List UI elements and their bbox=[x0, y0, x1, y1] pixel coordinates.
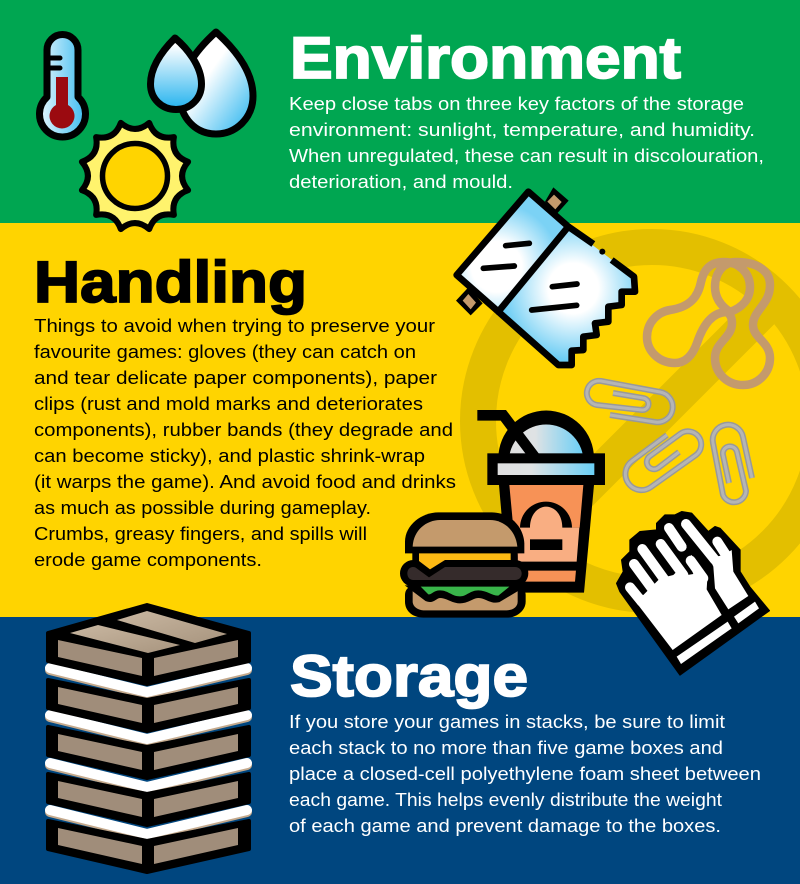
icon: paper clip 2 bbox=[625, 431, 701, 490]
text: handling body: Things to avoid when trying to preserve your bbox=[34, 316, 435, 336]
text: storage body: If you store your games in stacks, be sure to limit bbox=[289, 712, 725, 732]
icon: plastic shrink wrap bbox=[456, 187, 635, 365]
text: storage body: each game. This helps evenly distribute the weight bbox=[289, 790, 722, 810]
text: environment body: When unregulated, these can result in discolouration, bbox=[289, 146, 764, 166]
text: storage body: place a closed-cell polyethylene foam sheet between bbox=[289, 764, 761, 784]
box 5 bbox=[48, 821, 249, 872]
text: handling body: and tear delicate paper components), paper bbox=[34, 368, 437, 388]
text: handling body: Crumbs, greasy fingers, and spills will bbox=[34, 524, 367, 544]
box 2 bbox=[48, 680, 249, 731]
foam sheets bbox=[50, 668, 247, 836]
icon: prohibition sign bbox=[478, 247, 800, 595]
top box bbox=[48, 605, 249, 684]
text: handling body: (it warps the game). And avoid food and drinks bbox=[34, 472, 456, 492]
box 4 bbox=[48, 774, 249, 825]
heading: environment: Environment bbox=[290, 26, 681, 91]
icon: water drops bbox=[150, 32, 253, 134]
text: handling body: as much as possible during gameplay. bbox=[34, 498, 371, 518]
panel: storage bbox=[0, 617, 800, 884]
text: storage body: of each game and prevent damage to the boxes. bbox=[289, 816, 721, 836]
icon: gloves bbox=[617, 512, 769, 675]
panel: handling bbox=[0, 223, 800, 617]
icon: sun bbox=[82, 123, 188, 229]
text: handling body bbox=[34, 316, 456, 570]
text: environment body: Keep close tabs on three key factors of the storage bbox=[289, 94, 744, 114]
icon: thermometer bbox=[40, 34, 86, 137]
heading: handling: Handling bbox=[34, 250, 307, 315]
text: storage body: each stack to no more than five game boxes and bbox=[289, 738, 723, 758]
text: environment body: deterioration, and mould. bbox=[289, 172, 513, 192]
panel: environment bbox=[0, 0, 800, 223]
text: storage body bbox=[289, 712, 761, 836]
text: environment body: environment: sunlight, temperature, and humidity. bbox=[289, 120, 755, 140]
text: handling body: can become sticky), and plastic shrink-wrap bbox=[34, 446, 425, 466]
heading: storage: Storage bbox=[290, 644, 528, 709]
box 3 bbox=[48, 727, 249, 778]
text: environment body bbox=[289, 94, 764, 192]
icon: burger bbox=[400, 512, 528, 618]
icon: stack of boxes bbox=[48, 605, 249, 872]
text: handling body: favourite games: gloves (they can catch on bbox=[34, 342, 416, 362]
text: handling body: components), rubber bands (they degrade and bbox=[34, 420, 453, 440]
icon: rubber band bbox=[647, 262, 770, 385]
text: handling body: erode game components. bbox=[34, 550, 262, 570]
text: handling body: clips (rust and mold marks and deteriorates bbox=[34, 394, 423, 414]
icon: drink cup bbox=[477, 411, 605, 593]
icon: paper clip 1 bbox=[587, 381, 673, 422]
icon: paper clip 3 bbox=[713, 425, 752, 502]
